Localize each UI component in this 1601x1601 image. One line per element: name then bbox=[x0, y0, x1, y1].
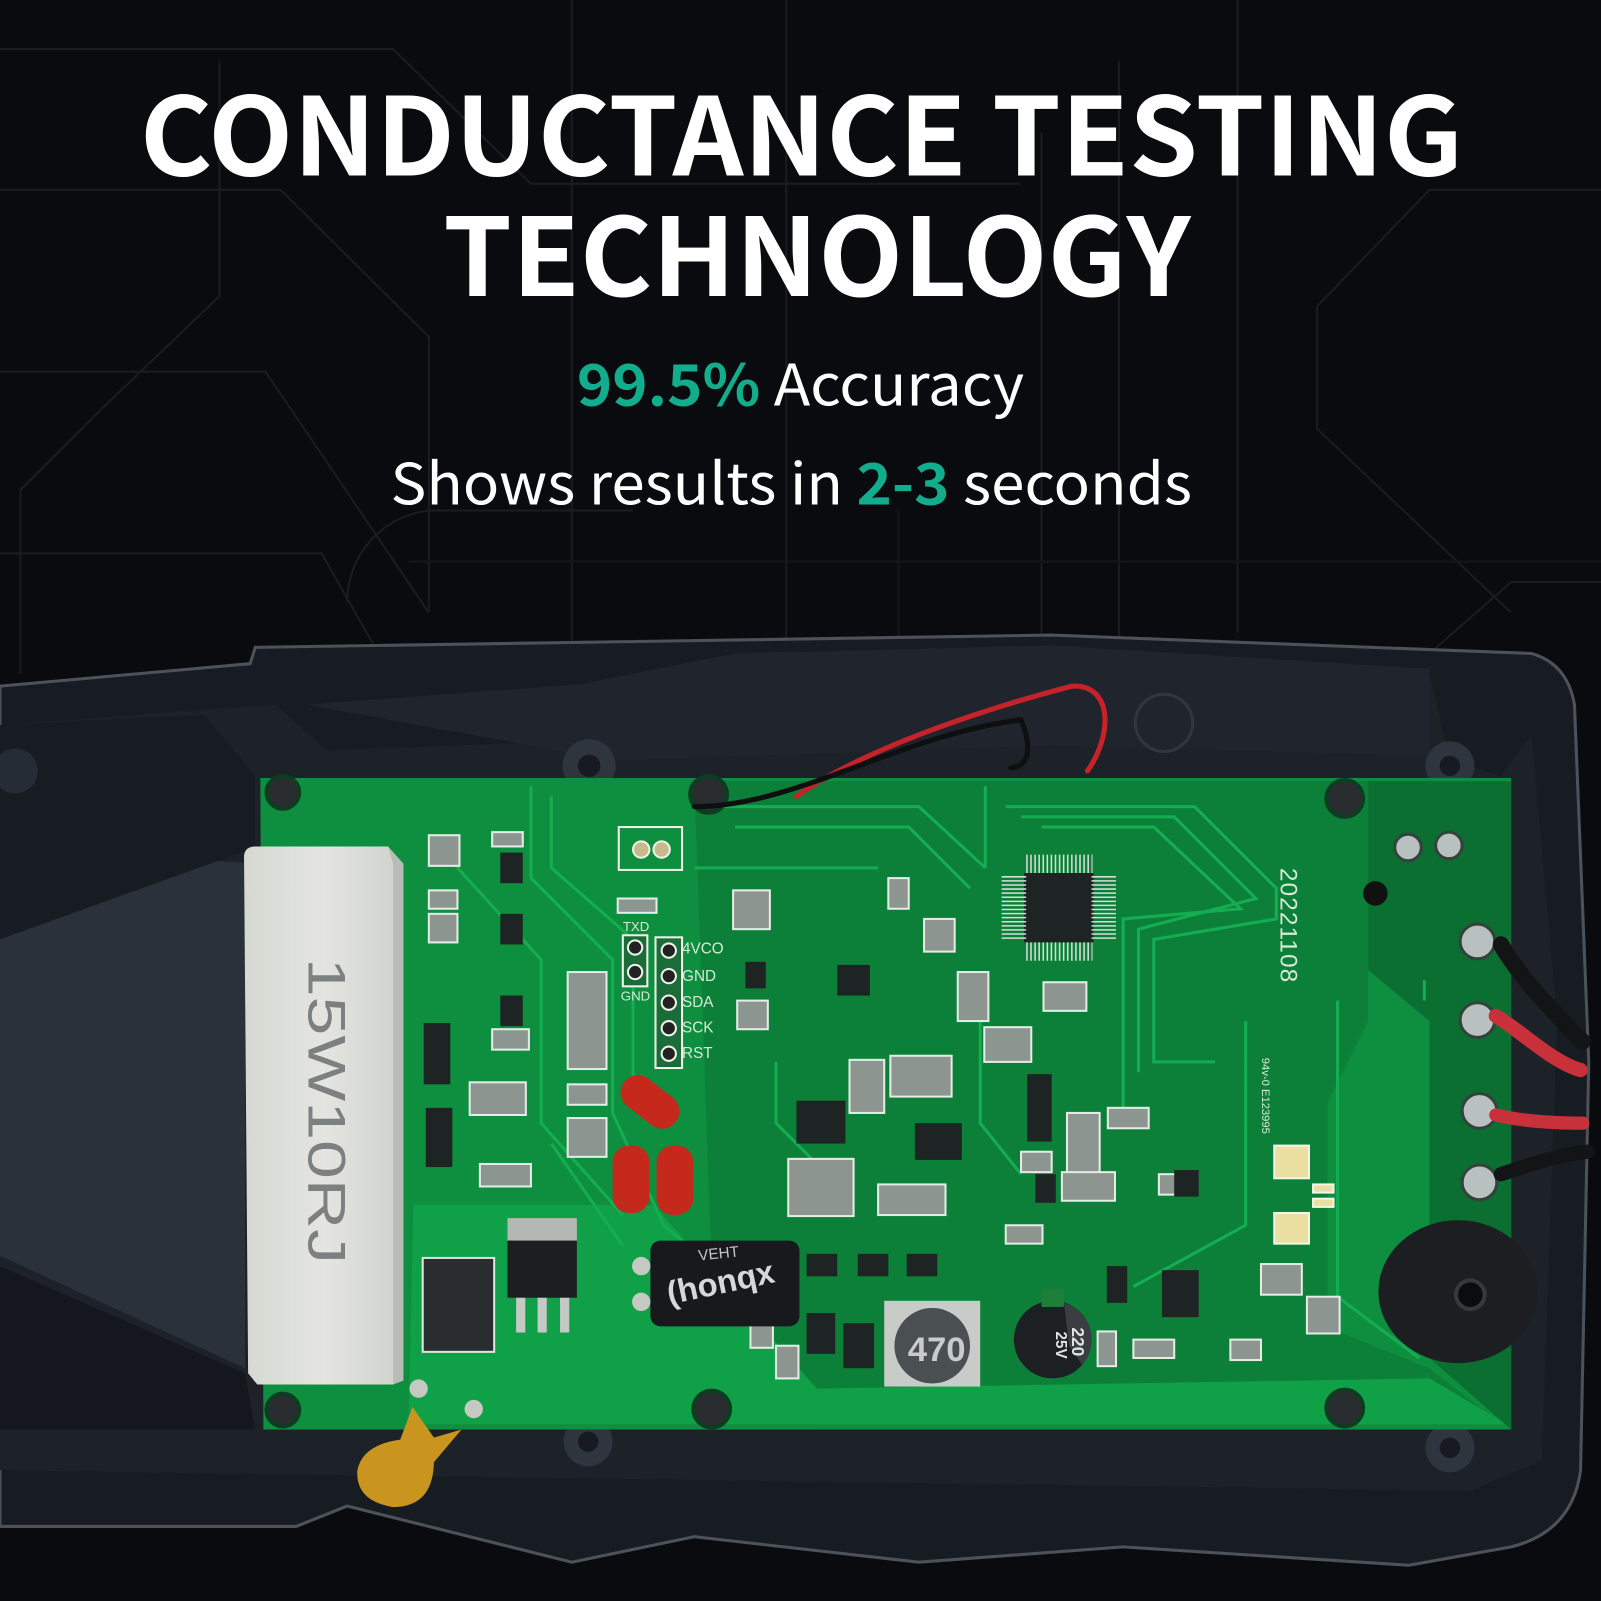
circuit board bbox=[260, 776, 1511, 1429]
electrolytic capacitor honqx bbox=[632, 1241, 799, 1326]
capacitor 220 25V: 220 bbox=[1068, 1327, 1088, 1356]
title bbox=[140, 51, 1463, 328]
inductor 470 bbox=[884, 1301, 980, 1387]
subtitle: speed: Shows results in 2-3 seconds bbox=[391, 439, 1192, 521]
title: CONDUCTANCE TESTING bbox=[140, 51, 1463, 208]
yellow varistor bbox=[357, 1379, 483, 1507]
pin header bbox=[619, 827, 682, 1068]
buzzer bbox=[1378, 1220, 1538, 1363]
capacitor 220 25V bbox=[1014, 1289, 1092, 1378]
silkscreen labels: TXD bbox=[623, 919, 649, 934]
silkscreen labels: SCK bbox=[682, 1019, 714, 1036]
silkscreen labels: RST bbox=[682, 1045, 713, 1062]
terminal posts bbox=[1395, 832, 1497, 1200]
silkscreen labels: GND bbox=[682, 968, 716, 985]
IC chips bbox=[424, 853, 1199, 1368]
red capacitors bbox=[613, 1068, 693, 1215]
silkscreen labels: 20221108 bbox=[1274, 868, 1301, 982]
voltage regulators bbox=[423, 1218, 577, 1352]
QFP pins bbox=[1014, 864, 1104, 952]
title: TECHNOLOGY bbox=[443, 171, 1192, 328]
tester housing bbox=[0, 635, 1589, 1565]
inductor 470: 470 bbox=[908, 1331, 966, 1369]
electrolytic capacitor honqx: VEHT bbox=[697, 1243, 740, 1265]
ceramic power resistor bbox=[244, 846, 403, 1385]
SMD parts bbox=[429, 832, 1340, 1378]
electrolytic capacitor honqx: (honqx bbox=[663, 1253, 777, 1311]
silkscreen labels: SDA bbox=[682, 994, 714, 1011]
capacitor 220 25V: 25V bbox=[1052, 1331, 1069, 1359]
screws bbox=[266, 776, 1363, 1427]
ceramic power resistor: 15W10RJ bbox=[296, 958, 355, 1264]
wires bbox=[694, 686, 1588, 1174]
silkscreen labels bbox=[621, 868, 1301, 1134]
silkscreen labels: 94v-0 E123995 bbox=[1259, 1058, 1271, 1134]
gold test pads bbox=[1274, 1146, 1333, 1244]
subtitle: accuracy: 99.5% Accuracy bbox=[577, 340, 1024, 422]
silkscreen labels: 4VCO bbox=[682, 941, 724, 958]
silkscreen labels: GND bbox=[621, 989, 650, 1004]
copper traces bbox=[439, 786, 1424, 1358]
